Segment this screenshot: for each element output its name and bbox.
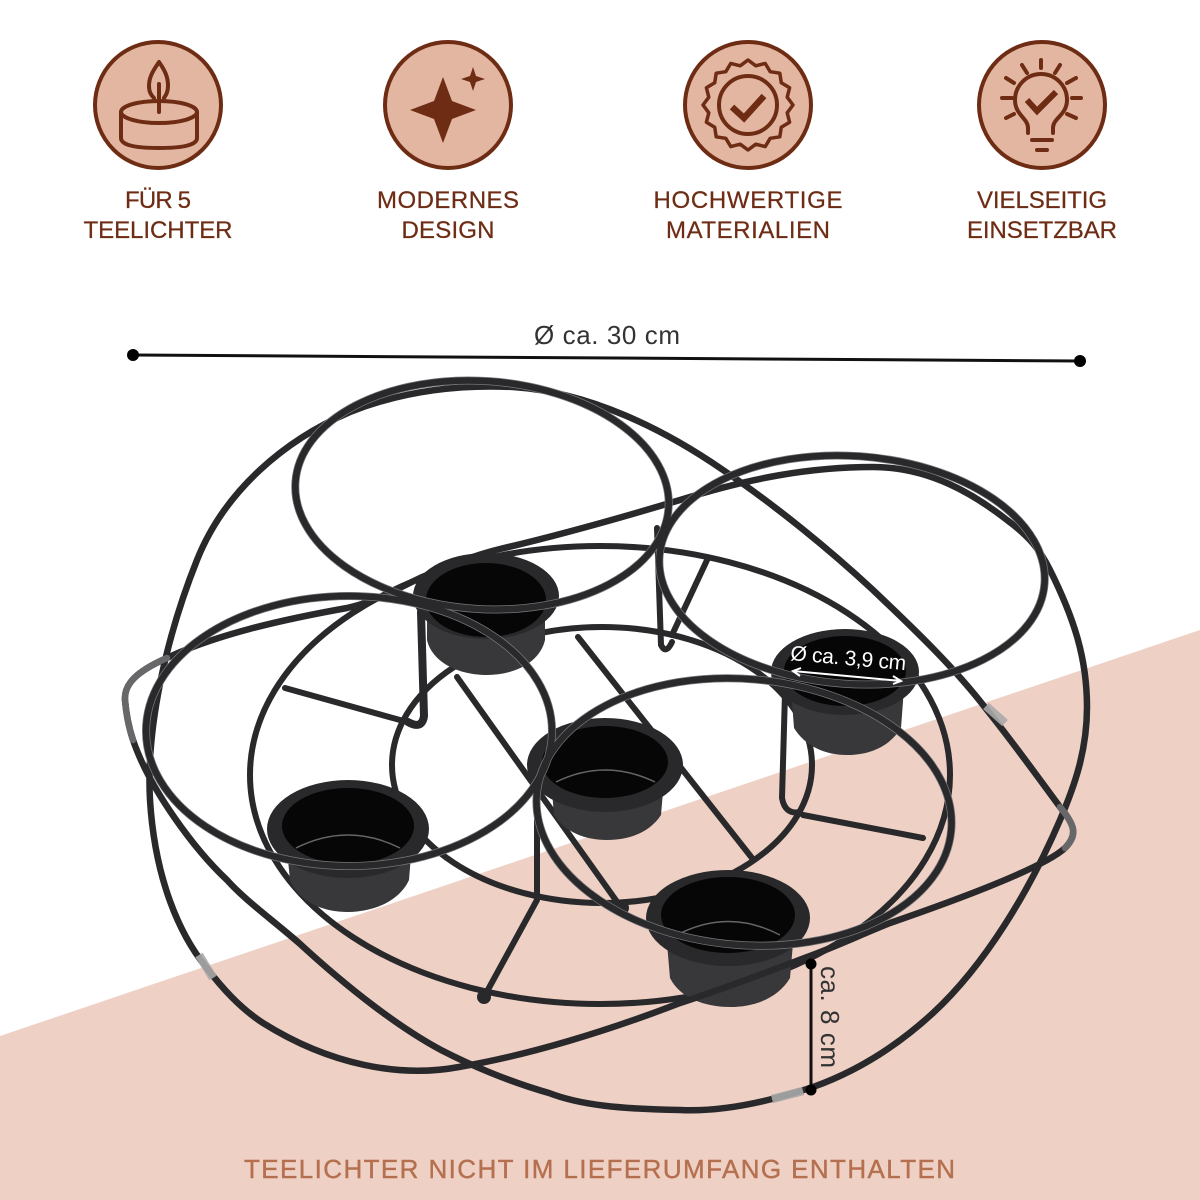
dimension: overall diameter xyxy=(127,320,1086,367)
product: metal tealight holder xyxy=(125,368,1087,1110)
connector sleeves xyxy=(199,706,1005,1099)
icon: tealight candle xyxy=(95,42,221,168)
feature: for 5 tealights xyxy=(84,42,232,244)
feature: high quality materials xyxy=(654,42,842,244)
label: modernes design: MODERNES xyxy=(377,187,519,214)
dimension: overall diameter: Ø ca. 30 cm xyxy=(534,320,680,350)
feature: versatile use xyxy=(967,42,1117,244)
dimension: height xyxy=(806,958,845,1096)
label: für 5 teelichter: FÜR 5 xyxy=(125,187,191,214)
label: hochwertige materialien: MATERIALIEN xyxy=(666,217,830,244)
label: für 5 teelichter: TEELICHTER xyxy=(84,217,232,244)
cups xyxy=(267,553,919,1007)
pink diagonal background xyxy=(0,630,1200,1200)
cup: left xyxy=(267,780,429,912)
label: vielseitig einsetzbar: EINSETZBAR xyxy=(967,217,1117,244)
label: hochwertige materialien: HOCHWERTIGE xyxy=(654,187,842,214)
cup: top xyxy=(413,553,559,675)
four upper rings xyxy=(146,368,1052,963)
dimension: height: ca. 8 cm xyxy=(815,966,845,1068)
cup: bottom xyxy=(646,870,810,1007)
cup: centre xyxy=(527,718,683,840)
icon: quality seal with check xyxy=(685,42,811,168)
label: vielseitig einsetzbar: VIELSEITIG xyxy=(977,187,1107,214)
footer note: TEELICHTER NICHT IM LIEFERUMFANG ENTHALTEN xyxy=(244,1154,955,1184)
feature: modern design xyxy=(377,42,519,244)
large outer wires xyxy=(125,386,1087,1110)
icon: light bulb with check xyxy=(979,42,1105,168)
dimension: cup diameter: Ø ca. 3,9 cm xyxy=(790,642,907,675)
base rings and spokes xyxy=(250,528,950,1004)
icon: sparkle stars xyxy=(385,42,511,168)
label: modernes design: DESIGN xyxy=(402,217,494,244)
cup: right xyxy=(771,629,919,755)
